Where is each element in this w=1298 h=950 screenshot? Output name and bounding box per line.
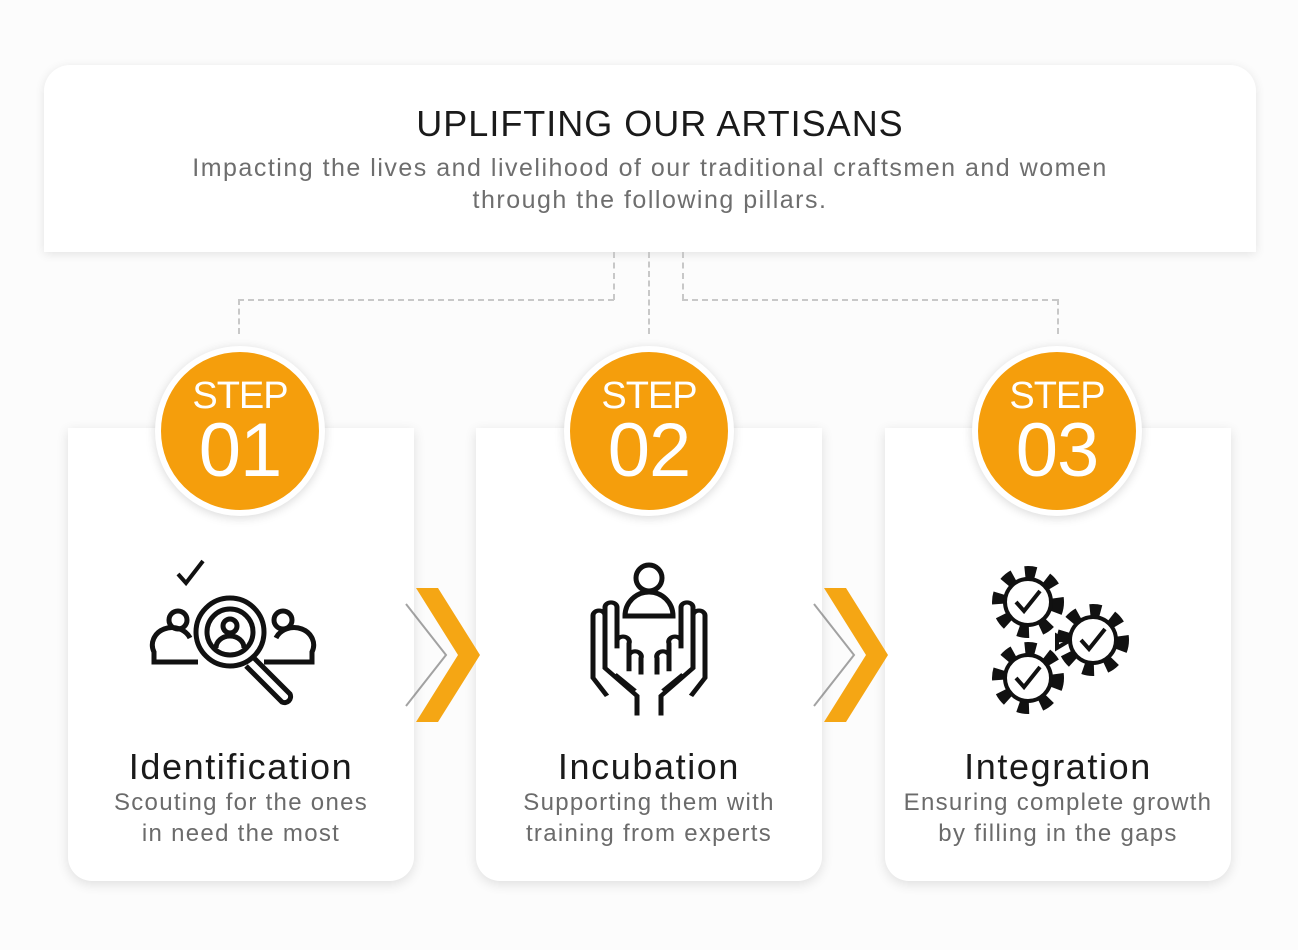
icon: gears with checks [992, 566, 1129, 714]
step 3 circle: STEP [1009, 375, 1105, 417]
description: Scouting for the ones [114, 789, 368, 816]
description [904, 789, 1212, 847]
step 2 circle [564, 346, 734, 516]
description: by filling in the gaps [938, 820, 1178, 847]
description: Supporting them with [523, 789, 775, 816]
heading: Identification [129, 746, 353, 787]
title: UPLIFTING OUR ARTISANS [416, 103, 904, 144]
arrow 1 [405, 588, 480, 722]
step 2 circle: STEP [601, 375, 697, 417]
subtitle: through the following pillars. [473, 186, 827, 214]
description [523, 789, 775, 847]
description: in need the most [142, 820, 340, 847]
step 3 circle [972, 346, 1142, 516]
step 3 circle: 03 [1016, 408, 1098, 493]
step 1 circle [155, 346, 325, 516]
card 3 [885, 428, 1231, 881]
header panel [44, 65, 1256, 252]
description: Ensuring complete growth [904, 789, 1212, 816]
step 1 circle: 01 [199, 408, 281, 493]
step 2 circle: 02 [608, 408, 690, 493]
description: training from experts [526, 820, 772, 847]
card 2 [476, 428, 822, 881]
subtitle: Impacting the lives and livelihood of our traditional craftsmen and women [192, 154, 1108, 182]
heading: Integration [964, 746, 1152, 787]
icon: hands with person [590, 562, 708, 716]
step 1 circle: STEP [192, 375, 288, 417]
icon: magnifier on people [150, 560, 316, 706]
arrow 2 [813, 588, 888, 722]
subtitle [192, 154, 1108, 214]
heading: Incubation [558, 746, 740, 787]
card 1 [68, 428, 414, 881]
description [114, 789, 368, 847]
